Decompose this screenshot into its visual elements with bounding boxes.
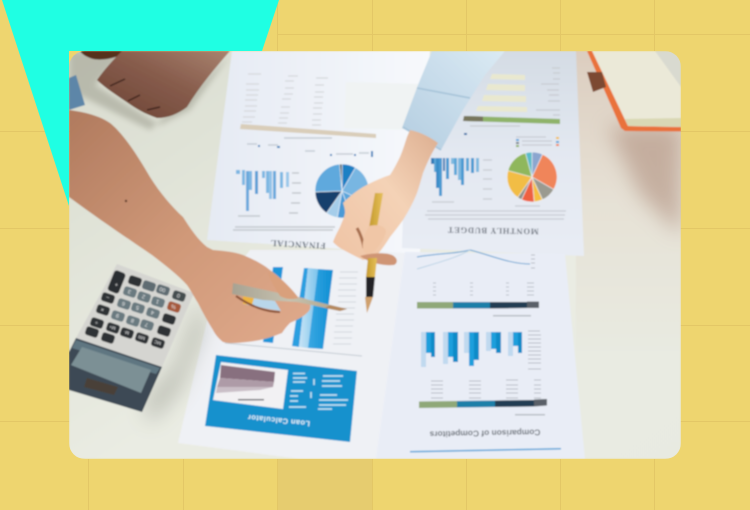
crease between fingers holding pen	[357, 228, 364, 248]
bar chart: monthly budget vs actual	[431, 158, 479, 196]
financial legend swatches	[258, 146, 372, 157]
stripe table first stripe	[263, 267, 283, 343]
blue calculator panel	[205, 355, 357, 442]
sales table header band	[419, 399, 547, 408]
paper: comparison of competitors sheet	[376, 250, 585, 459]
calculator keys: M-	[123, 329, 130, 336]
yellow chart piece in the gap	[243, 296, 254, 305]
calculator keys: M+	[108, 324, 116, 331]
line chart	[417, 250, 530, 264]
notebook	[587, 51, 681, 132]
bar chart: budget vs actual	[236, 170, 289, 211]
calculator keys: 5	[135, 304, 140, 310]
calculator keys: –	[104, 293, 110, 300]
caption: unit sales	[515, 414, 545, 416]
desk surface	[69, 51, 681, 459]
budget legend swatches	[464, 133, 559, 147]
paper: monthly budget sheet	[402, 51, 584, 256]
stripe table row labels	[333, 272, 358, 344]
calculator keys: 00	[159, 285, 167, 293]
mole on arm	[125, 200, 127, 202]
calculator keys: 0	[176, 292, 181, 298]
calculator keys: 6	[121, 300, 126, 306]
budget table labels	[470, 68, 560, 145]
right hand	[333, 130, 438, 260]
solar panel	[84, 378, 118, 395]
fist shadow	[69, 51, 230, 130]
line chart second series	[417, 250, 470, 269]
tan total band	[240, 124, 376, 138]
book shadow	[608, 126, 681, 235]
monthly chart axis labels	[425, 160, 566, 219]
white inset chart	[213, 362, 288, 409]
desk warm right side	[576, 51, 681, 266]
gold pen	[365, 193, 383, 313]
calculator keys: 9	[115, 312, 120, 318]
crease between fingers	[236, 296, 280, 312]
silver pen	[232, 283, 347, 311]
caption: quantity	[493, 315, 531, 316]
stripe table blue stripe	[308, 269, 333, 349]
calculator display base	[69, 338, 162, 412]
calculator keys: +	[114, 281, 119, 287]
right shirt sleeve	[402, 51, 505, 150]
calculator screen	[71, 347, 151, 393]
bar chart axis labels	[528, 331, 541, 369]
calculator keys: 1	[155, 298, 160, 304]
cyan angular shape	[2, 0, 279, 206]
calculator keys: 4	[150, 309, 155, 315]
upper fingertip over pen	[268, 272, 298, 299]
calculator keys: ÷	[94, 319, 99, 325]
budget table highlighted rows	[476, 74, 527, 112]
calculator keys: %	[170, 302, 177, 310]
stripe table dark stripe	[292, 268, 308, 347]
financial legend	[247, 138, 369, 154]
calculator shadow	[145, 300, 205, 425]
dark start of total band	[463, 116, 483, 122]
photo: hands analysing financial documents	[69, 51, 681, 459]
left arm and hand	[69, 110, 310, 343]
heading: MONTHLY BUDGET: MONTHLY BUDGET	[447, 225, 539, 237]
paper: loan calculator sheet	[178, 250, 415, 459]
calculator keys	[84, 269, 187, 349]
paper: financial sheet	[207, 51, 430, 254]
sales table rows	[431, 380, 541, 398]
calculator keys: 7	[144, 321, 149, 327]
calculator keys: MR	[137, 334, 146, 341]
lower fingertip lobe	[360, 253, 397, 265]
calculator keys: 2	[141, 293, 146, 299]
stripe table axis rule	[225, 343, 362, 356]
pie chart: financial	[315, 164, 369, 218]
heading: Loan Calculator: Loan Calculator	[247, 413, 310, 428]
budget chart axis labels	[233, 173, 335, 230]
calculator keys: 3	[127, 288, 132, 294]
heading: Comparison of Competitors: Comparison of Competitors	[429, 428, 541, 439]
panel controls and small labels	[289, 374, 348, 409]
calculator keys: 8	[130, 317, 135, 323]
side table panel	[402, 86, 416, 124]
gap between fingers showing paper	[243, 296, 281, 311]
shirt cuff: left person	[69, 75, 85, 110]
quantity table rows	[433, 283, 534, 295]
line chart axis	[531, 255, 535, 268]
calculator keys: ×	[100, 306, 105, 312]
quantity table header band	[417, 302, 539, 308]
calculator screen rim	[72, 340, 160, 374]
green total band	[465, 116, 560, 124]
blue rule	[410, 448, 561, 452]
thumb over gold pen	[363, 225, 386, 254]
heading: FINANCIAL: FINANCIAL	[270, 238, 326, 251]
calculator body	[76, 264, 194, 367]
fist: upper hand	[97, 51, 230, 118]
financial table rows	[242, 74, 328, 125]
calculator	[69, 264, 194, 412]
stripe table light stripe	[299, 268, 318, 348]
bar chart: competitor comparison	[421, 332, 522, 367]
calculator keys: MC	[153, 339, 162, 346]
small dark knuckle at the photo edge	[80, 51, 128, 60]
pie chart: monthly budget	[507, 152, 557, 202]
